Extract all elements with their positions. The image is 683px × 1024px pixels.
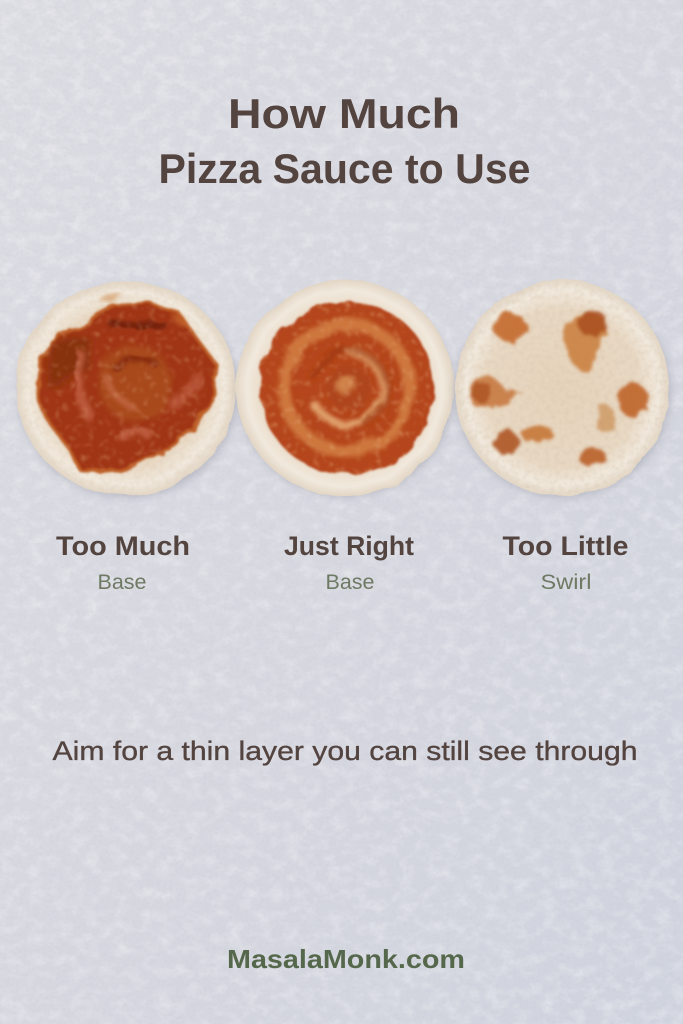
website credit: MasalaMonk.com bbox=[227, 944, 465, 974]
pizza: just right sauce bbox=[236, 280, 454, 497]
dough base 3 bbox=[455, 280, 669, 496]
label: too little: Swirl bbox=[540, 571, 592, 594]
label: too much bbox=[56, 531, 190, 594]
pizza: too little sauce bbox=[455, 280, 671, 498]
title: Pizza Sauce to Use bbox=[158, 145, 530, 192]
title bbox=[158, 90, 530, 192]
label: too little: Too Little bbox=[502, 531, 628, 561]
label: just right bbox=[284, 531, 414, 594]
label: too much: Too Much bbox=[56, 531, 190, 561]
sauce patches 3 bbox=[468, 310, 648, 466]
dough base 2 bbox=[236, 280, 454, 496]
tip text: Aim for a thin layer you can still see through bbox=[52, 736, 638, 766]
label: just right: Just Right bbox=[284, 531, 414, 561]
sauce blob 1 bbox=[30, 295, 225, 475]
pizza: too much sauce bbox=[16, 280, 238, 498]
label: too much: Base bbox=[98, 571, 146, 594]
label: just right: Base bbox=[326, 571, 374, 594]
title: How Much bbox=[228, 90, 460, 137]
dough base 1 bbox=[16, 281, 236, 495]
sauce spiral 2 bbox=[255, 295, 440, 480]
label: too little bbox=[502, 531, 628, 594]
